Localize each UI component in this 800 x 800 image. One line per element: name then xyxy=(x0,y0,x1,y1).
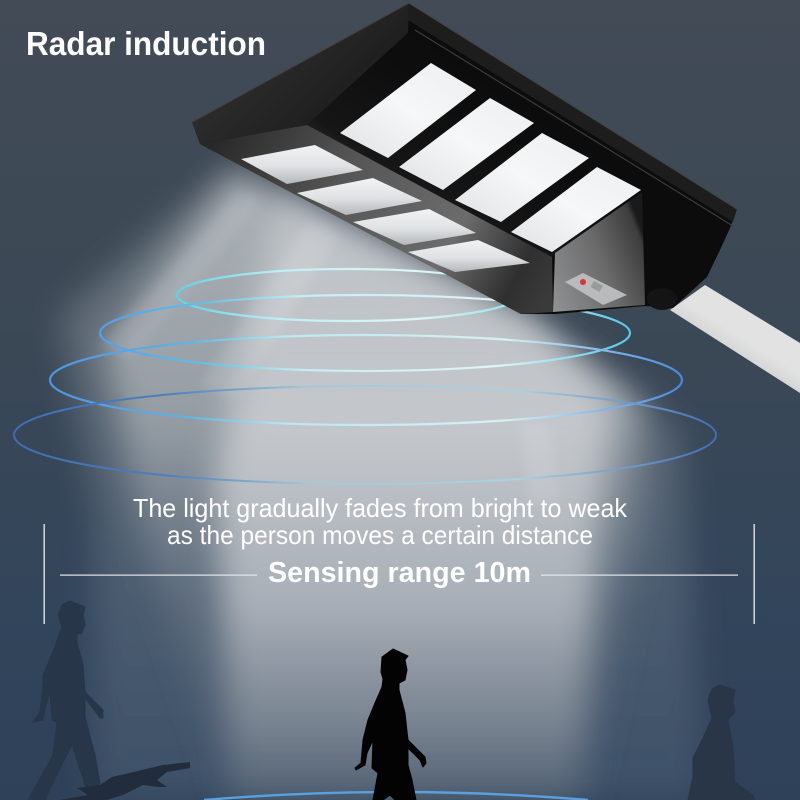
shadow on ground xyxy=(60,762,190,800)
person: left faded xyxy=(28,601,103,800)
title: Radar induction xyxy=(26,25,266,62)
lamp pole xyxy=(670,285,800,393)
lower LED module 3 xyxy=(353,209,476,245)
description text xyxy=(133,493,628,550)
top rim xyxy=(408,3,737,222)
ring 1 xyxy=(177,269,519,321)
ring 4 xyxy=(14,386,716,484)
dark upper face xyxy=(307,33,641,257)
end box xyxy=(553,192,645,312)
left sloped cover xyxy=(192,3,409,144)
lower LED module 1 xyxy=(241,145,363,184)
upper LED module 1 xyxy=(340,63,476,158)
ground ring xyxy=(204,792,588,800)
ring 2 xyxy=(100,295,630,371)
person: centre xyxy=(355,649,426,800)
range label: Sensing range 10m xyxy=(268,557,531,589)
solar street lamp xyxy=(192,3,737,314)
rim highlight xyxy=(192,3,737,209)
lower body band xyxy=(200,125,553,314)
ring 3 xyxy=(50,335,682,425)
radar rings xyxy=(14,269,716,484)
pole joint xyxy=(647,288,677,310)
rim inner line xyxy=(415,30,733,226)
upper LED module 4 xyxy=(511,167,641,252)
light beam xyxy=(60,165,705,800)
lower LED module 2 xyxy=(297,178,422,215)
sensor panel xyxy=(565,273,627,305)
person: right faded xyxy=(688,685,755,800)
description text: as the person moves a certain distance xyxy=(167,520,593,550)
upper LED module 3 xyxy=(455,133,589,222)
lamp outer shell xyxy=(192,3,737,314)
description text: The light gradually fades from bright to weak xyxy=(133,493,628,523)
lower LED module 4 xyxy=(408,240,530,272)
upper LED module 2 xyxy=(399,98,534,190)
